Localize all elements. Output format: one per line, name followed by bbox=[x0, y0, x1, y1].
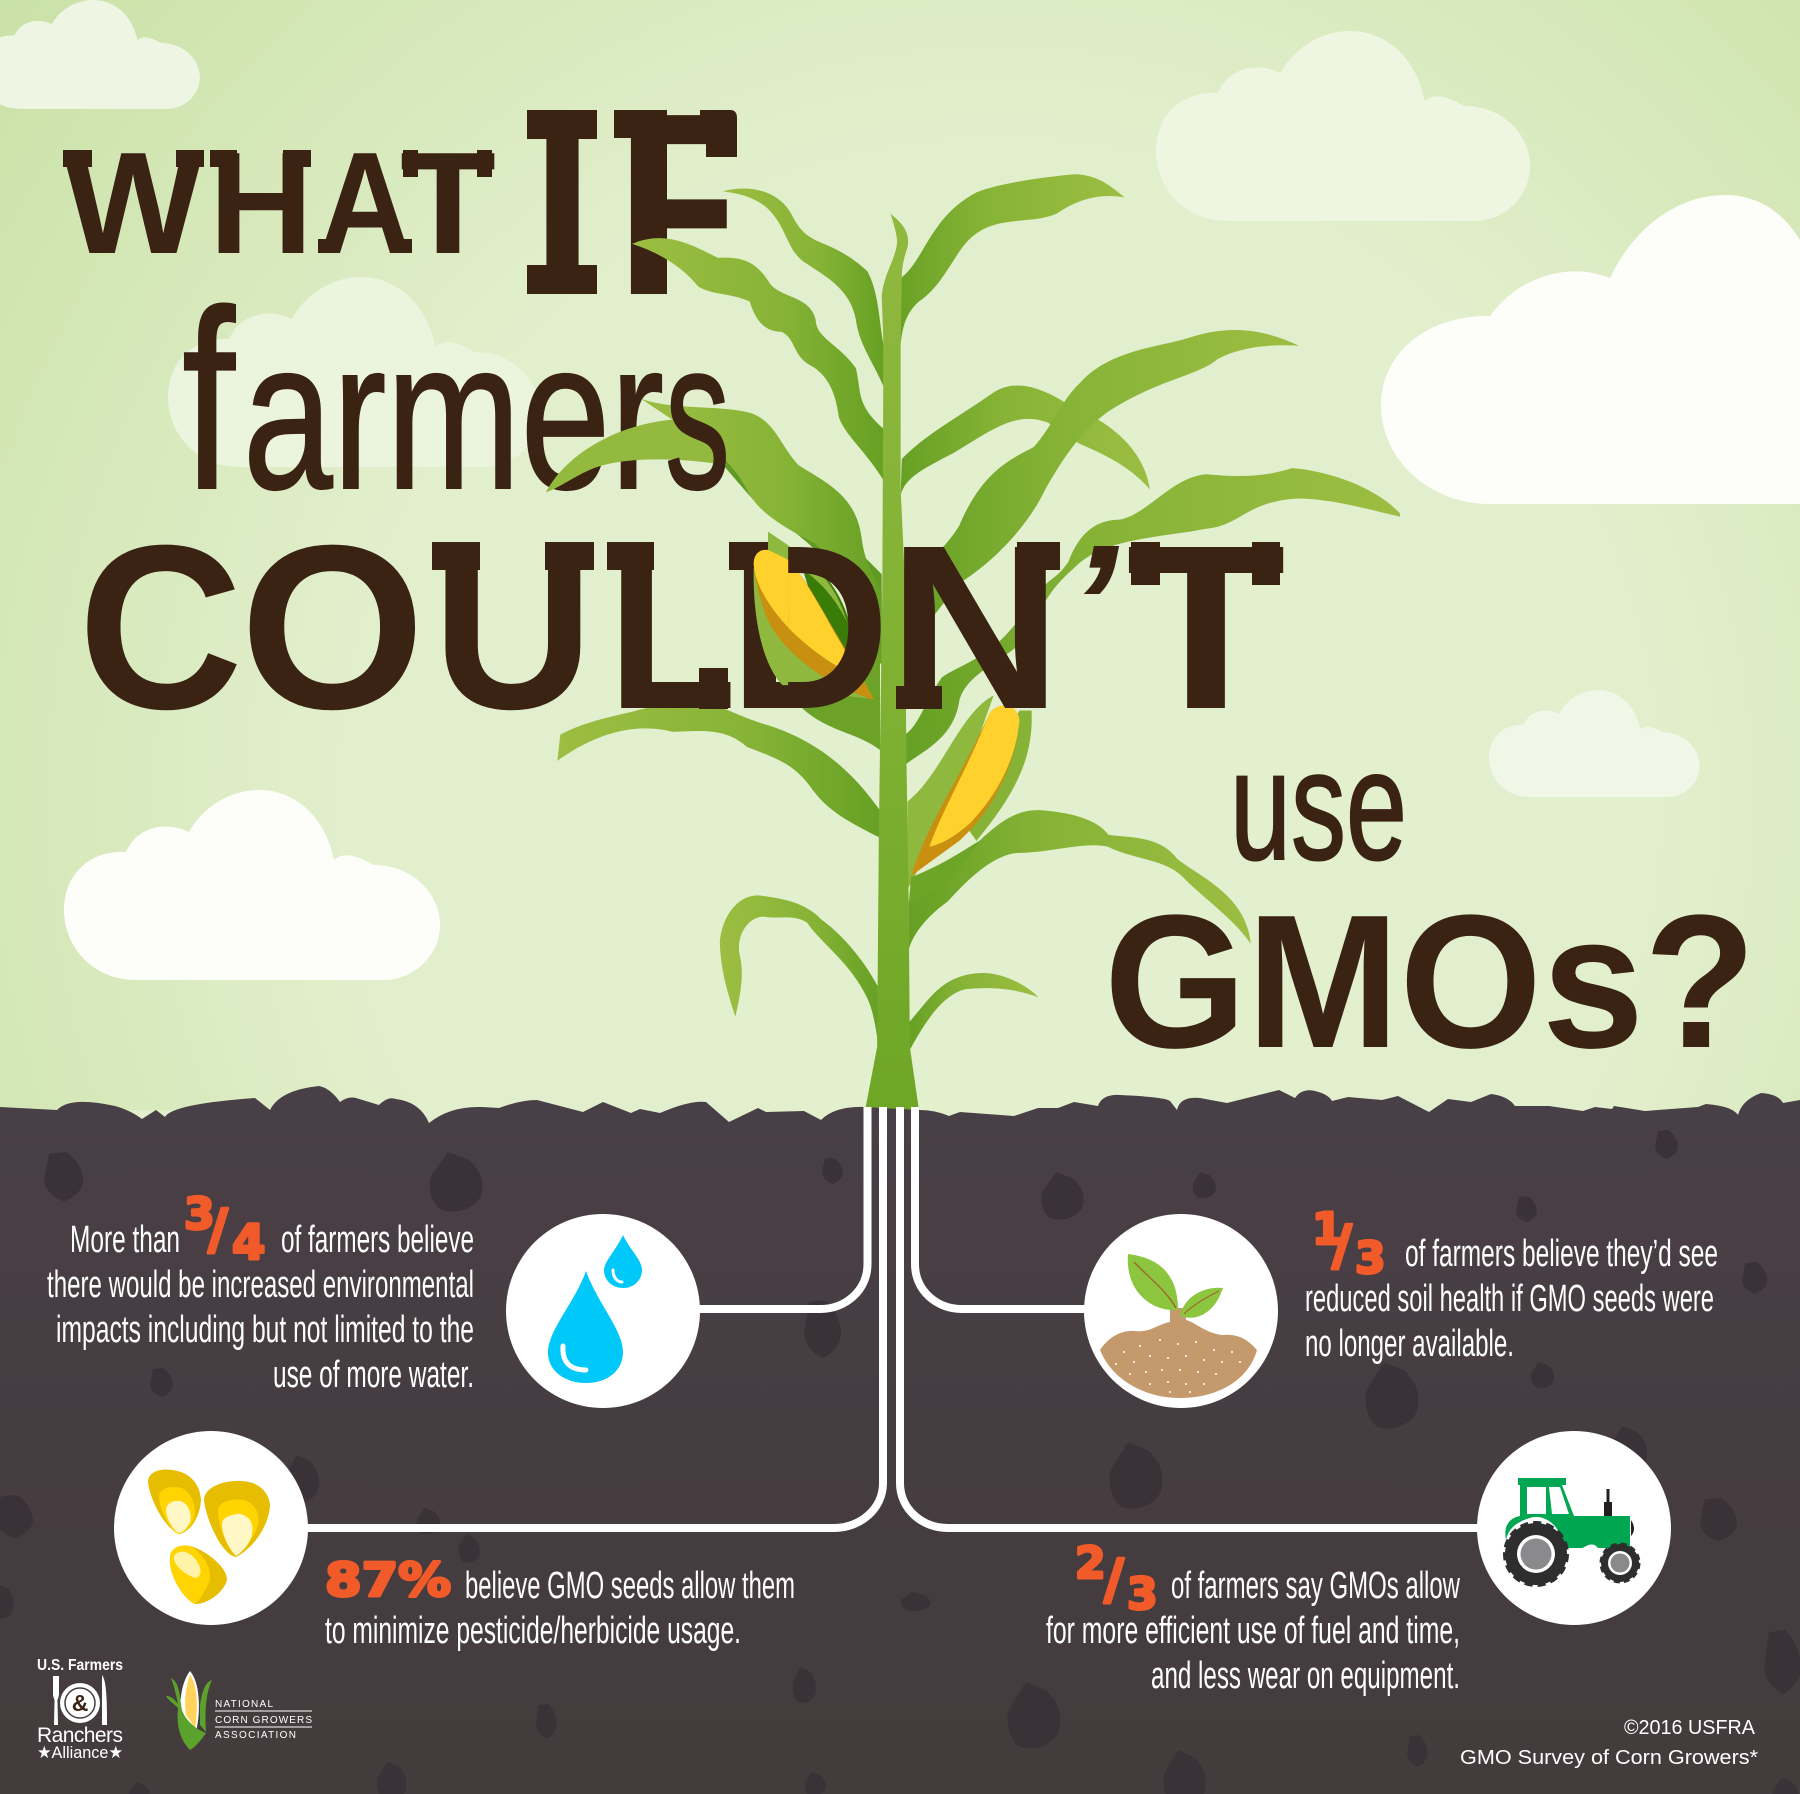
logo: U.S. Farmers and Ranchers Alliance: & bbox=[72, 1690, 88, 1716]
title word: WHAT: W bbox=[63, 122, 203, 284]
stat: 2/3: 3 bbox=[1127, 1569, 1158, 1620]
logo: U.S. Farmers and Ranchers Alliance bbox=[37, 1657, 123, 1762]
logo: National Corn Growers Association: CORN GROWERS bbox=[215, 1715, 312, 1726]
leaf: second left bbox=[632, 238, 883, 480]
leaf: mid left fold bbox=[672, 420, 882, 665]
text block: 87 percent, pesticide usage: believe GMO seeds allow them bbox=[465, 1565, 795, 1607]
icon: corn kernels bbox=[114, 1431, 308, 1625]
stat: 1/3: 3 bbox=[1355, 1233, 1386, 1284]
text block: 87 percent, pesticide usage bbox=[325, 1553, 795, 1652]
stat: 3/4: 3 bbox=[184, 1189, 215, 1240]
logo: National Corn Growers Association bbox=[166, 1671, 312, 1750]
stat: 1/3: 1 bbox=[1312, 1204, 1343, 1255]
copyright and source: GMO Survey of Corn Growers* bbox=[1460, 1747, 1758, 1769]
title word: WHAT: H bbox=[209, 122, 313, 284]
logo: U.S. Farmers and Ranchers Alliance: Ranchers bbox=[37, 1724, 123, 1747]
leaf: long right upper bbox=[905, 330, 1299, 653]
leaf: low left curl bbox=[720, 895, 878, 1041]
corn plant bbox=[546, 174, 1400, 1111]
text block: three quarters, environmental impacts: there would be increased environmental bbox=[47, 1264, 474, 1306]
text block: two thirds, fuel and time: and less wear on equipment. bbox=[1151, 1655, 1460, 1697]
title word: WHAT: T bbox=[400, 122, 496, 284]
stem bbox=[865, 214, 919, 1111]
logo: National Corn Growers Association: NATIONAL bbox=[215, 1699, 273, 1710]
title word: COULDN'T: O bbox=[240, 496, 425, 758]
logo: U.S. Farmers and Ranchers Alliance: U.S. Farmers bbox=[37, 1657, 123, 1674]
stat: 87%: 87% bbox=[325, 1553, 451, 1607]
icon: tractor bbox=[1477, 1431, 1671, 1625]
title word: armer with f, behind leaves: armer bbox=[243, 296, 664, 533]
title word: IF bbox=[527, 60, 737, 350]
title word: COULDN'T bbox=[78, 496, 1286, 758]
title word: COULDN'T: N bbox=[888, 496, 1062, 758]
title word: IF: I bbox=[532, 60, 594, 350]
text block: two thirds, fuel and time: for more efficient use of fuel and time, bbox=[1046, 1610, 1460, 1652]
text block: one third, soil health bbox=[1305, 1204, 1718, 1365]
icon: water drops bbox=[506, 1214, 700, 1408]
text block: three quarters, environmental impacts bbox=[47, 1189, 474, 1396]
title word: IF: F bbox=[618, 60, 736, 350]
title word: use: use bbox=[1230, 719, 1407, 893]
logo: U.S. Farmers and Ranchers Alliance: ★Alliance★ bbox=[37, 1743, 123, 1762]
title word: COULDN'T: U bbox=[432, 496, 594, 758]
cloud: top right bbox=[1156, 31, 1530, 221]
title word: WHAT bbox=[63, 122, 496, 284]
text block: 87 percent, pesticide usage: to minimize pesticide/herbicide usage. bbox=[325, 1610, 741, 1652]
title word: COULDN'T: ’ bbox=[1067, 510, 1120, 700]
text block: three quarters, environmental impacts: More than bbox=[70, 1219, 180, 1261]
stat: 1/3: / bbox=[1332, 1214, 1352, 1277]
leaf: top right bbox=[890, 174, 1125, 356]
leaf: long right lower bbox=[905, 468, 1400, 765]
corn cob: left, husk and kernels in front of D stem bbox=[754, 532, 788, 686]
copyright and source bbox=[1460, 1717, 1758, 1769]
text block: three quarters, environmental impacts: use of more water. bbox=[273, 1354, 474, 1396]
leaf: mid left back bbox=[641, 398, 882, 665]
soil bbox=[0, 1086, 1800, 1794]
cloud: top left bbox=[0, 0, 200, 109]
corn cob: right bbox=[908, 695, 1032, 904]
title word: COULDN'T: D bbox=[729, 496, 890, 758]
logo: National Corn Growers Association: ASSOCIATION bbox=[215, 1730, 296, 1741]
stat: 2/3: 2 bbox=[1075, 1538, 1106, 1589]
leaf: top left bbox=[723, 188, 883, 386]
cloud: behind farmers bbox=[168, 277, 540, 467]
title word: WHAT: A bbox=[318, 122, 412, 284]
title word: COULDN'T: L bbox=[607, 496, 737, 758]
leaf: mid left tip bbox=[546, 419, 727, 492]
title word: armer with f, behind leaves bbox=[182, 258, 664, 543]
leaf: low right bbox=[909, 973, 1038, 1050]
clouds bbox=[0, 0, 1800, 980]
sky background bbox=[0, 0, 1800, 1110]
title word: COULDN'T: T bbox=[1126, 496, 1286, 758]
small wheel bbox=[1601, 1544, 1639, 1582]
title letter: s of farmers, in front of leaf: s bbox=[665, 296, 730, 533]
cloud: lower left bbox=[64, 790, 440, 980]
stat: 3/4: / bbox=[208, 1198, 228, 1261]
corn cob: left bbox=[754, 532, 874, 700]
stat: 2/3: / bbox=[1104, 1548, 1124, 1611]
title word: GMOs?: GMOs? bbox=[1104, 876, 1756, 1088]
icon: seedling in soil bbox=[1084, 1214, 1278, 1408]
soil rocks bbox=[0, 1130, 1800, 1794]
title word: armer with f, behind leaves: f bbox=[182, 258, 236, 543]
copyright and source: ©2016 USFRA bbox=[1624, 1717, 1756, 1739]
roots: white connector lines bbox=[300, 1107, 1490, 1528]
text block: one third, soil health: no longer available. bbox=[1305, 1323, 1514, 1365]
text block: two thirds, fuel and time: of farmers say GMOs allow bbox=[1171, 1565, 1460, 1607]
cloud: large right bbox=[1381, 195, 1800, 504]
stat: 3/4: 4 bbox=[232, 1215, 265, 1271]
big wheel bbox=[1505, 1523, 1567, 1585]
text block: two thirds, fuel and time bbox=[1046, 1538, 1460, 1697]
leaf: lower left long bbox=[557, 698, 880, 838]
title word: COULDN'T: C bbox=[78, 496, 243, 758]
leaf: short right bbox=[901, 385, 1150, 495]
leaf: under cob bbox=[801, 635, 880, 750]
leaf: lower right long bbox=[909, 810, 1251, 950]
cloud: small right bbox=[1489, 690, 1700, 797]
text block: three quarters, environmental impacts: of farmers believe bbox=[281, 1219, 474, 1261]
text block: three quarters, environmental impacts: impacts including but not limited to the bbox=[56, 1309, 474, 1351]
